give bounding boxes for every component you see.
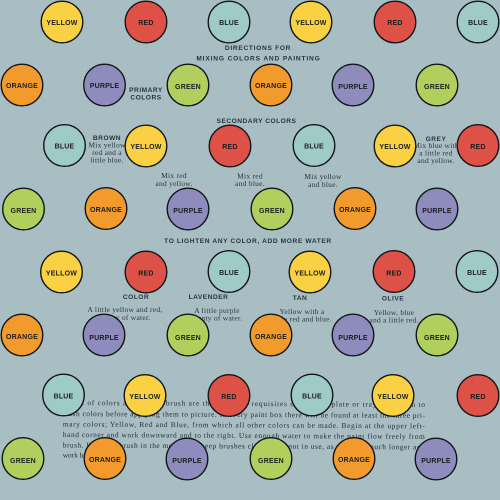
text: mix yellow and blue — [304, 172, 342, 189]
row 7 dots: RED — [470, 394, 486, 401]
paragraph: painting directions: brush. Keep the brush in the mouth and keep brushes clean when not in use, as they last much longer and — [63, 440, 425, 451]
row 5 dots: RED — [138, 270, 154, 278]
text: brown: red and a — [92, 148, 122, 157]
row 4 dots: ORANGE — [339, 207, 371, 214]
paragraph: painting directions: work better. — [63, 450, 98, 460]
text: mix yellow and blue: Mix yellow — [304, 172, 342, 181]
text: color — [88, 294, 162, 322]
row 7 dots — [43, 374, 499, 416]
row 4 dots: GREEN — [11, 208, 36, 215]
row 2 dots: PURPLE — [338, 84, 368, 91]
row 5 dots: RED — [386, 270, 402, 278]
row 8 dots — [2, 438, 457, 480]
row 2 dots: ORANGE — [6, 83, 38, 90]
paragraph: painting directions: mary colors; Yellow, Red and Blue, from which all other colors can be made. Begin at the upper left- — [63, 419, 425, 430]
row 6 dots: ORANGE — [255, 334, 287, 341]
row 6 dots: GREEN — [175, 335, 201, 342]
text: olive: and a little red. — [369, 316, 419, 324]
text: lavender: LAVENDER — [189, 294, 228, 301]
text: lavender: plenty of water. — [192, 314, 242, 322]
row 3 dots: RED — [222, 144, 238, 151]
title — [196, 45, 321, 62]
paragraph: painting directions: wash colors before applying them to picture. In every paint box there will be found at least the three pri- — [63, 409, 426, 420]
text: mix red and blue — [235, 172, 265, 188]
row 1 dots: BLUE — [468, 20, 488, 27]
row 6 dots — [1, 314, 458, 356]
row 2 dots — [1, 64, 458, 106]
text: mix red and yellow: and yellow. — [155, 179, 193, 188]
row 1 dots: RED — [387, 20, 403, 27]
text: color: A little yellow and red, — [88, 305, 162, 314]
text: grey: a little red — [419, 148, 453, 158]
row 3 dots: BLUE — [304, 144, 324, 150]
text: lavender: A little purple — [194, 306, 240, 315]
row 4 dots: GREEN — [259, 208, 285, 215]
text: color: plenty of water. — [100, 313, 150, 322]
row 7 dots: RED — [221, 394, 237, 401]
row 2 dots: GREEN — [175, 84, 201, 91]
row 4 dots: ORANGE — [90, 207, 122, 214]
row 3 dots: RED — [470, 144, 486, 151]
text: tan: little red and blue. — [272, 314, 332, 324]
row 6 dots: PURPLE — [338, 335, 368, 342]
row 5 dots: YELLOW — [294, 270, 326, 278]
row 6 dots: PURPLE — [89, 335, 119, 342]
text: olive: Yellow, blue — [374, 308, 415, 317]
row 8 dots: ORANGE — [338, 457, 370, 464]
row 1 dots: RED — [138, 20, 154, 27]
row 2 dots: GREEN — [424, 84, 450, 91]
row 7 dots: YELLOW — [377, 394, 409, 401]
text: mix red and yellow: Mix red — [161, 171, 187, 180]
heading: secondary colors: SECONDARY COLORS — [217, 118, 297, 125]
row 8 dots: GREEN — [10, 458, 36, 465]
text: tan: TAN — [293, 295, 307, 302]
row 4 dots — [3, 188, 458, 230]
text: tan: Yellow with a — [280, 307, 325, 316]
heading: lighten: TO LIGHTEN ANY COLOR, ADD MORE WATER — [164, 238, 332, 245]
row 3 dots: YELLOW — [130, 144, 162, 151]
row 3 dots: BLUE — [55, 144, 75, 150]
text: brown — [88, 135, 126, 164]
text: grey: Mix blue with — [413, 141, 459, 150]
text: tan — [272, 295, 332, 324]
text: brown: little blue. — [90, 156, 124, 164]
text: mix yellow and blue: and blue. — [308, 180, 338, 189]
text: grey — [413, 136, 459, 165]
row 4 dots: PURPLE — [173, 208, 203, 215]
row 8 dots: PURPLE — [421, 458, 451, 465]
paragraph: painting directions — [63, 398, 426, 461]
row 2 dots: PURPLE — [90, 83, 119, 90]
text: olive — [369, 296, 419, 324]
row 3 dots: YELLOW — [379, 144, 411, 151]
row 1 dots: YELLOW — [295, 20, 327, 27]
row 1 dots: BLUE — [219, 20, 239, 27]
text: mix red and blue: and blue. — [235, 179, 265, 188]
text: grey: and yellow. — [417, 156, 455, 165]
title: MIXING COLORS AND PAINTING — [196, 56, 321, 62]
text: mix red and yellow — [155, 171, 193, 188]
text: brown: Mix yellow — [88, 140, 126, 150]
row 8 dots: ORANGE — [89, 457, 121, 464]
row 6 dots: ORANGE — [6, 334, 38, 341]
row 7 dots: YELLOW — [129, 394, 161, 401]
row 3 dots — [44, 125, 499, 167]
text: olive: OLIVE — [382, 296, 404, 302]
row 1 dots: YELLOW — [46, 20, 78, 27]
row 4 dots: PURPLE — [422, 208, 452, 215]
row 1 dots — [41, 1, 499, 43]
paragraph: painting directions: A box of colors and a good brush are the essential requisites on a white plate or tray, and wash to — [63, 398, 425, 409]
row 6 dots: GREEN — [424, 335, 450, 342]
heading: primary colors: COLORS — [130, 94, 162, 102]
text: lavender — [189, 294, 242, 322]
heading: primary colors — [129, 87, 163, 102]
paragraph: painting directions: hand corner and work downward and to the right. Use enough water to make the paint flow freely from — [63, 430, 425, 441]
text: color: COLOR — [123, 294, 149, 301]
text: grey: GREY — [426, 136, 446, 143]
row 8 dots: PURPLE — [172, 458, 202, 465]
heading: primary colors: PRIMARY — [129, 87, 163, 94]
row 7 dots: BLUE — [302, 394, 322, 400]
title: DIRECTIONS FOR — [225, 45, 291, 52]
row 5 dots: BLUE — [219, 270, 239, 277]
row 5 dots: BLUE — [467, 270, 487, 277]
text: brown: BROWN — [93, 135, 121, 142]
text: mix red and blue: Mix red — [237, 172, 263, 180]
row 2 dots: ORANGE — [255, 83, 287, 90]
row 5 dots: YELLOW — [46, 270, 77, 278]
row 7 dots: BLUE — [54, 394, 74, 400]
row 8 dots: GREEN — [258, 458, 284, 465]
row 5 dots — [41, 251, 498, 293]
